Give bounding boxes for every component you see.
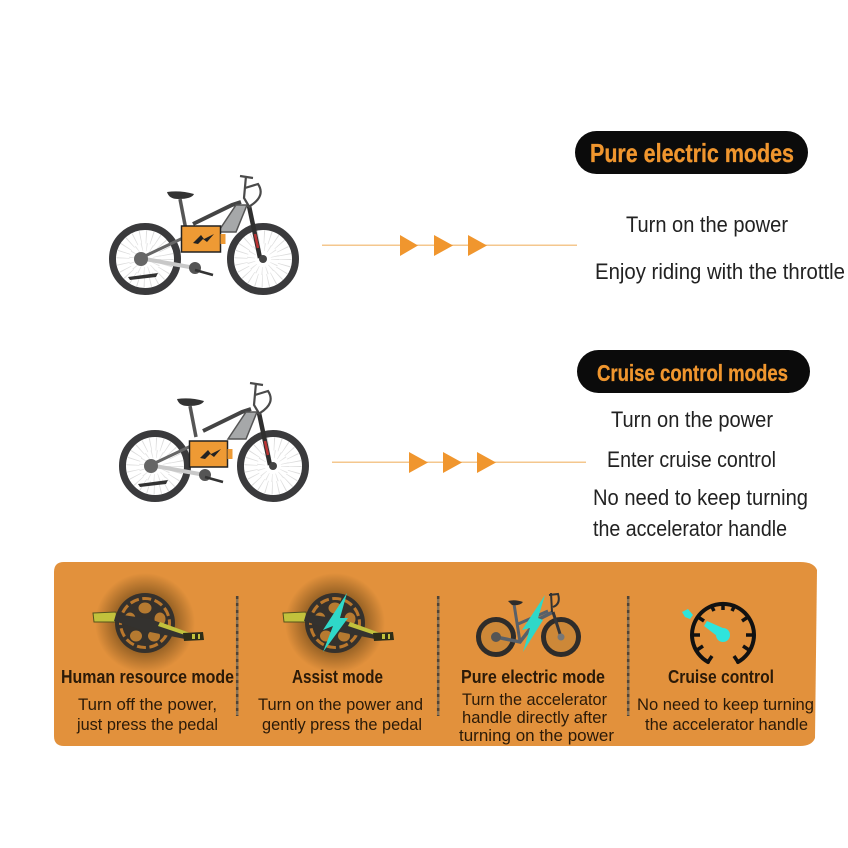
text: cruise control: the accelerator handle	[645, 715, 808, 734]
text: cruise control steps: Enter cruise control	[607, 447, 776, 472]
title: pure electric modes pill: Pure electric modes	[590, 138, 794, 168]
icon: crank with bolt, assist mode	[283, 573, 394, 673]
text: human resource mode: Turn off the power,	[78, 695, 217, 714]
arrow: bike to cruise control steps	[332, 452, 586, 473]
icon: speedometer	[682, 603, 754, 662]
text: cruise control: No need to keep turning	[637, 695, 814, 714]
text: assist mode: gently press the pedal	[262, 715, 422, 734]
arrow: bike to pure electric steps	[322, 235, 577, 256]
text: cruise control steps: No need to keep turning	[593, 485, 808, 510]
text: human resource mode: Human resource mode	[61, 667, 234, 687]
icon: bike with bolt, pure electric mode	[478, 593, 578, 654]
e-bike with battery, cruise control	[122, 383, 306, 498]
title: cruise control modes pill: Cruise control modes	[597, 360, 788, 386]
text: cruise control: Cruise control	[668, 667, 774, 687]
text: cruise control steps: the accelerator handle	[593, 516, 787, 541]
text: pure electric mode	[459, 667, 614, 745]
icon: crank, human mode	[93, 573, 204, 673]
text: pure electric mode: turning on the power	[459, 726, 614, 745]
panel: riding modes	[54, 562, 817, 746]
text: cruise control steps	[593, 407, 808, 541]
text: cruise control	[637, 667, 814, 734]
text: pure electric steps	[595, 212, 845, 284]
text: pure electric mode: handle directly after	[462, 708, 607, 727]
text: pure electric mode: Turn the accelerator	[462, 690, 607, 709]
text: assist mode: Assist mode	[292, 667, 383, 687]
text: assist mode: Turn on the power and	[258, 695, 423, 714]
text: human resource mode	[61, 667, 234, 734]
title: pure electric modes pill	[575, 131, 808, 174]
text: cruise control steps: Turn on the power	[611, 407, 773, 432]
title: cruise control modes pill	[577, 350, 810, 393]
e-bike with battery, pure electric	[112, 176, 296, 292]
text: pure electric steps: Turn on the power	[626, 212, 788, 237]
text: assist mode	[258, 667, 423, 734]
dividers	[237, 596, 628, 716]
text: pure electric mode: Pure electric mode	[461, 667, 605, 687]
text: human resource mode: just press the pedal	[76, 715, 218, 734]
